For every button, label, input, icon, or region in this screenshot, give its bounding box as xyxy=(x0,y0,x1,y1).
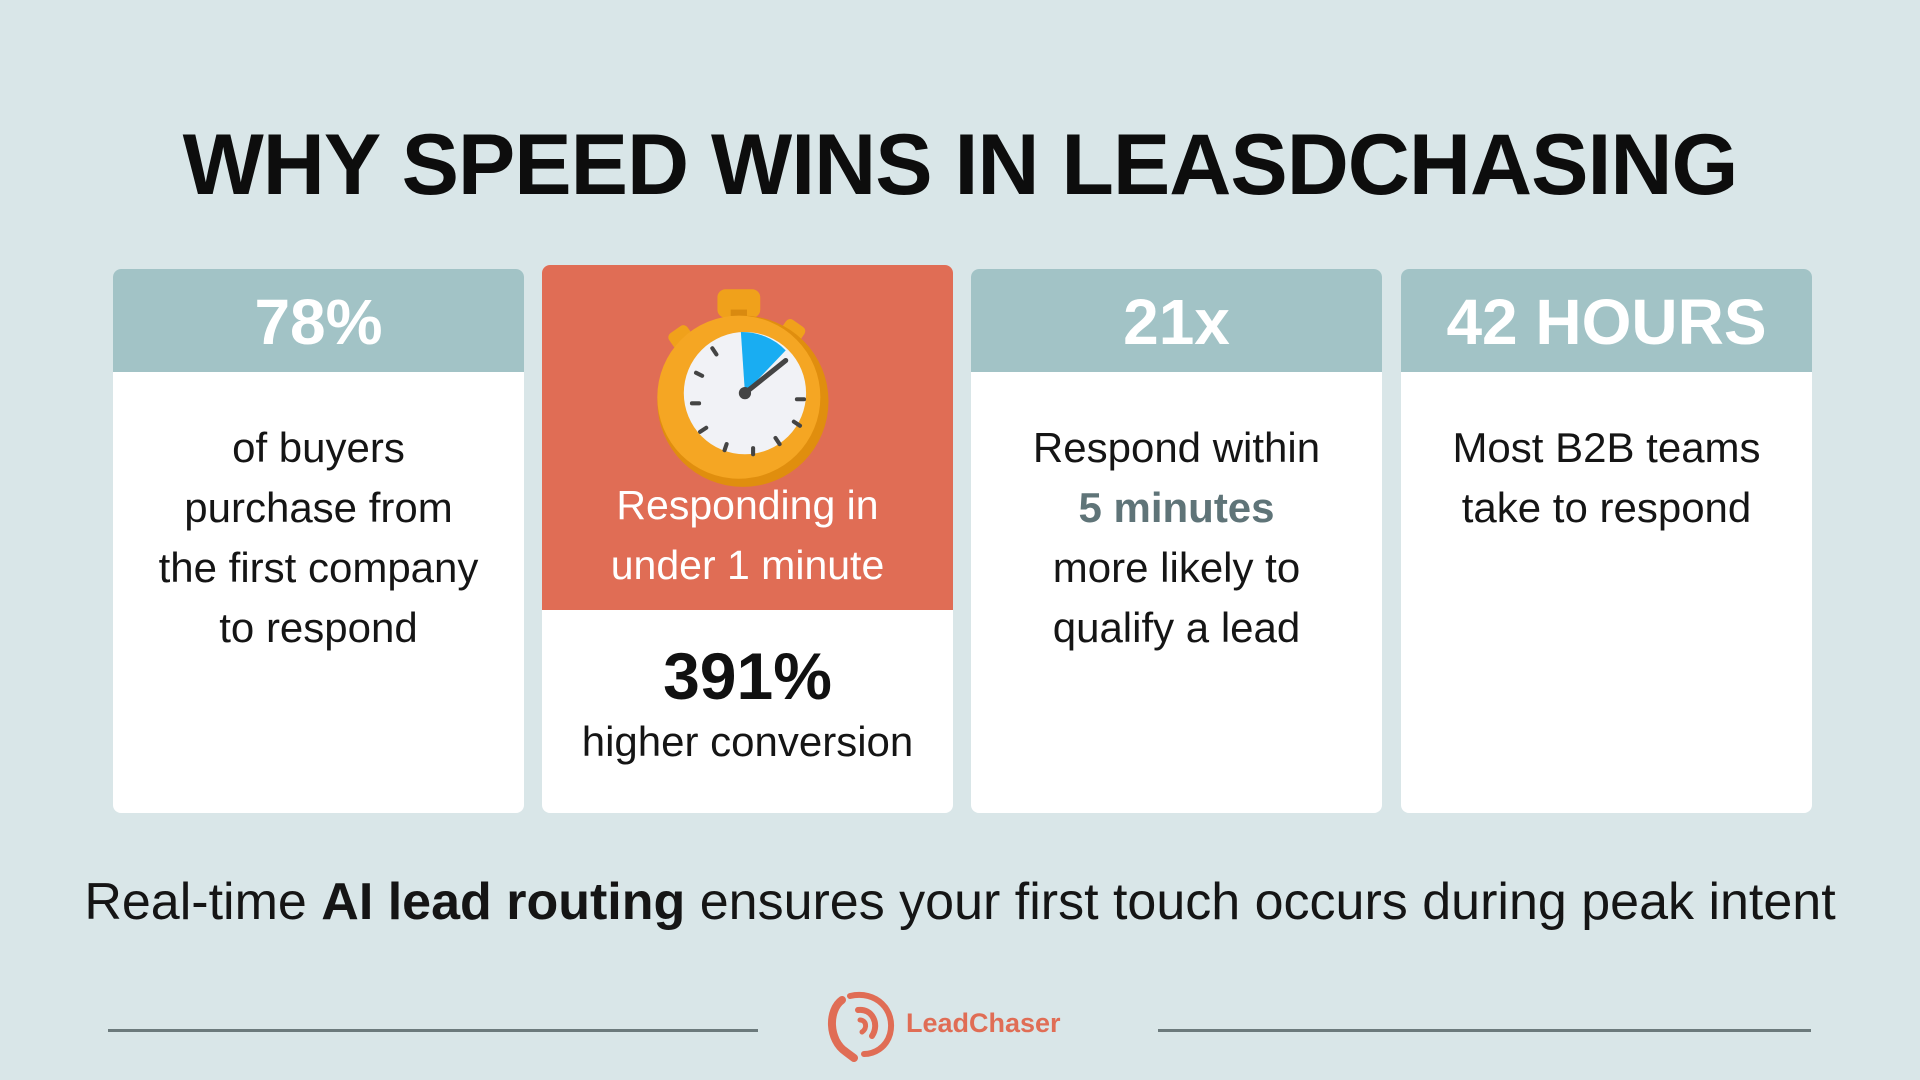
header: 78% xyxy=(113,269,524,372)
icon: stopwatch xyxy=(657,289,828,487)
stat: 391%: 391% xyxy=(663,639,832,713)
card: highlight xyxy=(542,265,953,813)
text: responding: Responding in xyxy=(616,482,879,528)
text: buyers: purchase from xyxy=(184,484,453,531)
header: 21x: 21x xyxy=(1123,286,1230,358)
text: respond within: Respond within xyxy=(1033,424,1320,471)
card: 21x xyxy=(971,269,1382,813)
card: 42 hours xyxy=(1401,269,1812,813)
orange panel xyxy=(542,265,953,610)
text: responding xyxy=(611,482,884,588)
text: respond within xyxy=(1033,424,1320,651)
text: buyers xyxy=(159,424,478,651)
text: respond within: qualify a lead xyxy=(1053,604,1300,651)
header: 78%: 78% xyxy=(254,286,383,358)
text: buyers: to respond xyxy=(219,604,418,651)
text: responding: under 1 minute xyxy=(611,542,884,588)
logo text: LeadChaser xyxy=(906,1008,1061,1038)
logo xyxy=(828,992,1061,1062)
icon: logo xyxy=(828,992,894,1062)
text: buyers: the first company xyxy=(159,544,478,591)
text: B2B teams xyxy=(1452,424,1761,531)
bottom statement: Real-time AI lead routing ensures your first touch occurs during peak intent xyxy=(84,873,1836,931)
text: B2B teams: take to respond xyxy=(1462,484,1751,531)
text: buyers: of buyers xyxy=(232,424,405,471)
text: respond within: more likely to xyxy=(1053,544,1300,591)
header: 42 hours xyxy=(1401,269,1812,372)
title: WHY SPEED WINS IN LEASDCHASING xyxy=(183,117,1737,213)
header: 42 hours: 42 HOURS xyxy=(1446,286,1767,358)
text: respond within: 5 minutes xyxy=(1078,484,1275,531)
card: 78% xyxy=(113,269,524,813)
header: 21x xyxy=(971,269,1382,372)
text: B2B teams: Most B2B teams xyxy=(1452,424,1761,471)
text: higher conversion: higher conversion xyxy=(582,718,913,765)
